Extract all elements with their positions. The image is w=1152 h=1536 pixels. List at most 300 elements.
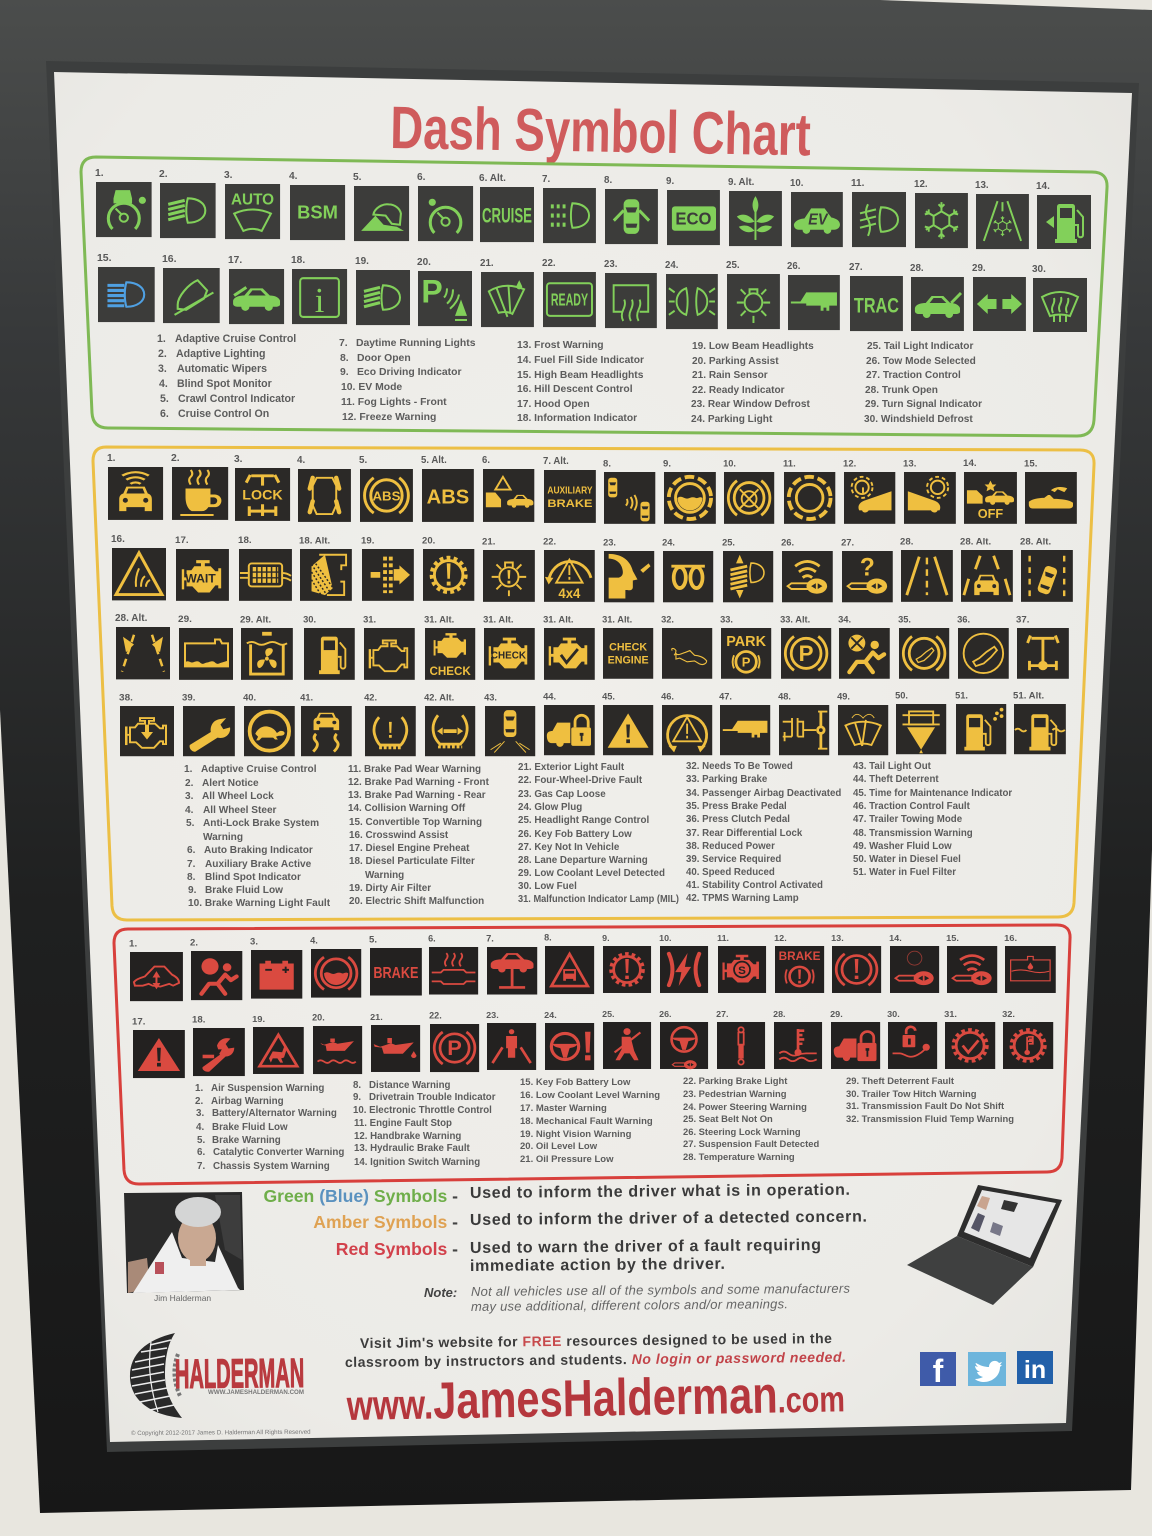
text block: amber list column 4: 34. Passenger Airbag Deactivated bbox=[686, 788, 841, 799]
icon: malfunction check inside: CHECK bbox=[491, 651, 527, 662]
icon: ignition switch warning bbox=[889, 933, 939, 993]
icon: press clutch pedal bbox=[957, 613, 1009, 679]
icon: night vision warning bbox=[252, 1014, 304, 1074]
icon: transmission warning bbox=[778, 691, 829, 755]
website url: www.JamesHalderman.com bbox=[345, 1364, 845, 1431]
icon: parking brake text: 33. bbox=[720, 614, 733, 624]
text block: green list column 5: 25. Tail Light Indicator bbox=[867, 341, 973, 352]
text block: red list column 4: 26. Steering Lock Warning bbox=[683, 1126, 801, 1137]
text block: red list column 1: 3. bbox=[196, 1108, 204, 1119]
text block: amber list column 1: All Wheel Lock bbox=[202, 791, 274, 802]
text block: amber list column 1: 7. bbox=[187, 859, 196, 870]
text block: red list column 5: 32. Transmission Fluid Temp Warning bbox=[846, 1113, 1014, 1124]
icon: washer fluid low: 49. bbox=[837, 691, 850, 701]
icon: transmission fluid temp warning bbox=[1002, 1009, 1053, 1069]
icon: parking brake text: PARK bbox=[726, 634, 767, 650]
icon: TPMS alt bbox=[424, 692, 475, 756]
icon: key not in vehicle bbox=[841, 537, 893, 602]
text block: green list column 4: 24. Parking Light bbox=[691, 414, 773, 425]
text block: green list column 2 bbox=[339, 338, 476, 423]
icon: windshield defrost: 30. bbox=[1032, 264, 1046, 275]
text block: green list column 1: Adaptive Cruise Control bbox=[175, 333, 296, 345]
icon: fuel fill side: 14. bbox=[1036, 181, 1050, 192]
icon: cruise control on alt: 6. Alt. bbox=[479, 173, 506, 184]
text block: amber list column 5: 51. Water in Fuel Filter bbox=[853, 867, 956, 878]
icon: high beam headlights: 15. bbox=[97, 253, 112, 264]
icon: water in diesel fuel bbox=[895, 690, 946, 754]
icon: blind spot indicator: 8. bbox=[603, 458, 611, 469]
icon: mechanical fault: 18. bbox=[192, 1015, 205, 1025]
icon: parking assist: P bbox=[421, 273, 443, 310]
text block: green list column 1: 6. bbox=[160, 408, 169, 420]
icon: crawl control bbox=[353, 172, 409, 241]
icon: oil pressure low bbox=[370, 1012, 420, 1072]
text block: amber list column 5 bbox=[853, 761, 1012, 878]
icon: auxiliary brake bbox=[543, 456, 596, 523]
icon: freeze warning bbox=[914, 179, 968, 248]
text block: green list column 3: 16. Hill Descent Control bbox=[517, 384, 633, 395]
icon: tail light out: 43. bbox=[484, 692, 497, 702]
text block: amber list column 5: 43. Tail Light Out bbox=[853, 761, 932, 772]
icon: drivetrain trouble bbox=[602, 933, 651, 993]
icon: seat belt not on: 25. bbox=[602, 1009, 614, 1019]
text block: green list column 4: 21. Rain Sensor bbox=[692, 370, 768, 381]
icon: pedestrian warning bbox=[486, 1010, 536, 1070]
text block: red list column 2: 13. Hydraulic Brake Fault bbox=[354, 1143, 471, 1154]
icon: parking brake alt: P bbox=[799, 641, 814, 666]
icon: adaptive lighting: 2. bbox=[159, 169, 168, 180]
icon: low coolant level detected: 29. bbox=[178, 614, 192, 625]
text block: green list column 3: 17. Hood Open bbox=[517, 399, 590, 410]
icon: EV mode: EV bbox=[808, 212, 829, 229]
legend: red symbols: Red Symbols - bbox=[336, 1239, 458, 1259]
text block: red list column 1 bbox=[195, 1083, 344, 1172]
icon: water in fuel filter alt bbox=[1013, 691, 1066, 754]
text block: amber list column 1: 8. bbox=[187, 872, 196, 883]
text block: red list column 2: 12. Handbrake Warning bbox=[354, 1131, 461, 1142]
icon: air suspension warning bbox=[129, 939, 183, 1001]
text block: amber list column 3: 24. Glow Plug bbox=[518, 802, 582, 813]
photo: Jim Halderman bbox=[124, 1192, 244, 1293]
text block: green list column 2: Eco Driving Indicator bbox=[357, 367, 462, 378]
icon: parking brake text bbox=[720, 614, 771, 679]
text block: amber list column 2: 20. Electric Shift Malfunction bbox=[349, 896, 484, 907]
text block: green list column 4: 20. Parking Assist bbox=[692, 356, 779, 367]
text block: amber list column 3: 29. Low Coolant Level Detected bbox=[518, 868, 665, 879]
icon: four wheel drive fault: 22. bbox=[543, 536, 556, 547]
text block: amber list column 4: 42. TPMS Warning Lamp bbox=[686, 893, 799, 904]
icon: cruise control on alt: CRUISE bbox=[482, 205, 532, 228]
text block: green list column 2: 11. Fog Lights - Front bbox=[341, 397, 447, 408]
legend: amber symbols: Amber Symbols - bbox=[313, 1212, 458, 1232]
text block: red list column 4: 25. Seat Belt Not On bbox=[683, 1113, 773, 1124]
text block: amber list column 5: 44. Theft Deterrent bbox=[853, 774, 939, 785]
icon: all wheel lock: LOCK bbox=[242, 487, 283, 502]
icon: tail light: 25. bbox=[726, 260, 740, 271]
icon: collision warning off mirrored bbox=[903, 458, 956, 524]
icon: electronic throttle control: 10. bbox=[659, 933, 671, 943]
text block: amber list column 3: 30. Low Fuel bbox=[518, 881, 577, 892]
icon: lane departure alt arrows: 28. Alt. bbox=[115, 613, 148, 624]
text block: amber list column 4: 38. Reduced Power bbox=[686, 841, 775, 852]
icon: check engine bbox=[602, 614, 653, 679]
icon: collision warning off mirrored: 13. bbox=[903, 458, 916, 469]
text block: green list column 3: 14. Fuel Fill Side Indicator bbox=[517, 355, 644, 366]
text block: red list column 5: 30. Trailer Tow Hitch Warning bbox=[846, 1088, 977, 1099]
icon: transmission fault do not shift: 31. bbox=[944, 1009, 957, 1019]
icon: lane departure alt car bbox=[960, 536, 1013, 602]
icon: tow mode bbox=[787, 261, 840, 330]
icon: windshield defrost bbox=[1032, 264, 1087, 332]
icon: malfunction indicator lamp bbox=[363, 614, 415, 680]
icon: lane departure bbox=[900, 536, 953, 602]
icon: rain sensor: 21. bbox=[480, 258, 494, 269]
icon: rear differential lock: 37. bbox=[1016, 614, 1029, 625]
icon: collision warning off: 14. bbox=[963, 458, 977, 469]
icon: TPMS warning: 42. bbox=[364, 692, 377, 702]
text block: red list column 3: 18. Mechanical Fault Warning bbox=[520, 1116, 653, 1127]
text block: green list column 1: 1. bbox=[157, 333, 166, 345]
icon: chassis system warning bbox=[486, 934, 537, 995]
icon: handbrake warning bbox=[774, 933, 824, 993]
text block: green list column 2: 10. EV Mode bbox=[341, 382, 402, 393]
text block: amber list column 4: 37. Rear Differential Lock bbox=[686, 828, 803, 839]
icon: all wheel lock: 3. bbox=[234, 454, 243, 465]
icon: information: 18. bbox=[291, 255, 305, 266]
text block: green list column 1: 4. bbox=[159, 378, 168, 390]
icon: headlight range control: 25. bbox=[722, 536, 735, 547]
icon: convertible top warning bbox=[1024, 458, 1077, 524]
icon: brake pad warning rear: 12. bbox=[843, 458, 856, 469]
text block: amber list column 1: 3. bbox=[185, 791, 194, 802]
icon: parking brake alt: 33. Alt. bbox=[780, 614, 810, 624]
icon: washer fluid low bbox=[837, 691, 888, 755]
icon: brake pad warning rear bbox=[843, 458, 895, 524]
icon: cruise control on alt bbox=[479, 173, 534, 242]
icon: door open: 8. bbox=[604, 175, 612, 186]
icon: exterior light fault: 21. bbox=[482, 536, 495, 547]
legend: green blue symbols: Green (Blue) Symbols - bbox=[263, 1186, 458, 1206]
text block: amber list column 4: 35. Press Brake Pedal bbox=[686, 801, 787, 812]
icon: malfunction check below: CHECK bbox=[429, 664, 471, 678]
icon: TPMS warning bbox=[364, 692, 416, 756]
text block: amber list column 1: Blind Spot Indicator bbox=[205, 872, 301, 883]
icon: brake fluid low: 9. bbox=[663, 458, 671, 469]
icon: chassis system warning: 7. bbox=[486, 934, 494, 944]
legend: green description: Used to inform the driver what is in operation. bbox=[470, 1182, 850, 1202]
icon: brake warning: 5. bbox=[369, 935, 377, 945]
icon: diesel engine preheat: WAIT bbox=[185, 572, 216, 586]
text block: amber list column 1: 4. bbox=[185, 805, 194, 816]
icon: facebook: f bbox=[933, 1353, 944, 1389]
icon: crawl control: 5. bbox=[353, 172, 362, 183]
text block: amber list column 3: 22. Four-Wheel-Drive Fault bbox=[518, 775, 643, 786]
text block: amber list column 1: 6. bbox=[187, 845, 196, 856]
icon: EV mode bbox=[790, 178, 843, 247]
text block: amber list column 1: Adaptive Cruise Control bbox=[201, 764, 317, 775]
icon: diesel particulate filter: 18. bbox=[238, 535, 252, 546]
text block: amber list column 2: 16. Crosswind Assist bbox=[349, 830, 449, 841]
panel: green symbols bbox=[81, 157, 1107, 436]
icon: diesel engine preheat: 17. bbox=[175, 535, 189, 546]
text block: red list column 2: Drivetrain Trouble Indicator bbox=[369, 1092, 496, 1103]
text block: green list column 5: 29. Turn Signal Indicator bbox=[865, 399, 982, 410]
text block: amber list column 2 bbox=[348, 764, 490, 907]
text block: red list column 4: 22. Parking Brake Light bbox=[683, 1075, 788, 1086]
icon: diesel engine preheat bbox=[175, 535, 229, 601]
text block: green list column 5: 27. Traction Control bbox=[866, 370, 961, 381]
text block: red list column 1: Airbag Warning bbox=[211, 1096, 284, 1107]
icon: coolant fan alt: 29. Alt. bbox=[240, 614, 271, 625]
icon: malfunction indicator lamp: 31. bbox=[363, 614, 376, 625]
text block: red list column 4: 24. Power Steering Warning bbox=[683, 1101, 807, 1112]
icon: cruise control on bbox=[417, 172, 473, 241]
text block: amber list column 1: 9. bbox=[188, 885, 197, 896]
text block: red list column 1: 6. bbox=[197, 1147, 205, 1158]
text block: green list column 2: 9. bbox=[340, 367, 349, 378]
text block: amber list column 3: 31. Malfunction Indicator Lamp (MIL) bbox=[518, 894, 679, 905]
icon: rear window defrost bbox=[604, 259, 657, 328]
icon: brake fluid low red: 4. bbox=[310, 936, 318, 946]
icon: speed reduced turtle: 40. bbox=[243, 692, 256, 702]
icon: airbag warning: 2. bbox=[190, 938, 198, 947]
text block: amber list column 1: Warning bbox=[203, 832, 243, 843]
icon: glow plug bbox=[662, 536, 713, 602]
icon: adaptive lighting bbox=[159, 169, 216, 238]
icon: auto braking: 6. bbox=[482, 455, 490, 466]
icon: alert notice cup: 2. bbox=[171, 453, 180, 464]
text block: red list column 2: 8. bbox=[353, 1080, 361, 1091]
text block: amber list column 5: 48. Transmission Warning bbox=[853, 828, 973, 839]
icon: press brake pedal bbox=[898, 614, 949, 679]
icon: lane departure alt drift bbox=[1020, 536, 1073, 602]
text block: amber list column 5: 45. Time for Maintenance Indicator bbox=[853, 788, 1012, 799]
icon: adaptive cruise control bbox=[95, 168, 152, 237]
icon: brake warning: BRAKE bbox=[373, 964, 418, 982]
text block: red list column 5 bbox=[846, 1075, 1014, 1124]
text block: red list column 4: 27. Suspension Fault Detected bbox=[683, 1138, 819, 1149]
text block: amber list column 1: 5. bbox=[186, 818, 195, 829]
text block: red list column 2: 10. Electronic Throttle Control bbox=[353, 1105, 492, 1116]
text block: green list column 4: 22. Ready Indicator bbox=[692, 385, 785, 396]
text block: red list column 1: 1. bbox=[195, 1083, 203, 1094]
text block: amber list column 3: 27. Key Not In Vehicle bbox=[518, 842, 620, 853]
icon: trailer tow hitch warning: 30. bbox=[887, 1009, 900, 1019]
text block: amber list column 2: 18. Diesel Particulate Filter bbox=[349, 856, 475, 867]
icon: cruise control on: 6. bbox=[417, 172, 426, 183]
text block: green list column 1: 5. bbox=[160, 393, 169, 405]
icon: adaptive cruise control amber bbox=[107, 453, 163, 520]
icon: fog lights front bbox=[851, 178, 906, 247]
icon: headlight range control bbox=[722, 536, 773, 602]
icon: parking light: 24. bbox=[665, 260, 679, 271]
text block: amber list column 3: 28. Lane Departure Warning bbox=[518, 855, 648, 866]
icon: low beam headlights: 19. bbox=[355, 256, 369, 267]
icon: press brake pedal: 35. bbox=[898, 614, 911, 624]
icon: automatic wipers bbox=[224, 170, 280, 239]
text block: green list column 2: 12. Freeze Warning bbox=[342, 412, 436, 423]
text block: red list column 4: 28. Temperature Warning bbox=[683, 1151, 795, 1162]
icon: blind spot indicator bbox=[603, 458, 655, 524]
text block: amber list column 2: 17. Diesel Engine Preheat bbox=[349, 843, 470, 854]
text block: amber list column 1: 2. bbox=[185, 778, 194, 789]
icon: lane departure: 28. bbox=[900, 536, 913, 547]
text block: green list column 1: Crawl Control Indicator bbox=[178, 393, 295, 405]
text block: amber list column 4: 32. Needs To Be Towed bbox=[686, 761, 793, 772]
text block: amber list column 3 bbox=[518, 762, 679, 905]
icon: hydraulic brake fault bbox=[831, 933, 881, 993]
icon: key fob battery low bbox=[781, 537, 833, 602]
icon: hood open: 17. bbox=[228, 255, 242, 266]
photo caption: Jim Halderman bbox=[154, 1293, 211, 1303]
text block: green list column 2: 8. bbox=[340, 353, 349, 364]
icon: engine fault stop: 11. bbox=[717, 933, 729, 943]
icon: twitter bbox=[968, 1352, 1006, 1386]
icon: malfunction check inside: 31. Alt. bbox=[483, 614, 514, 625]
icon: ABS alt: 5. Alt. bbox=[421, 455, 447, 466]
icon: rear differential lock bbox=[1016, 614, 1069, 679]
icon: crosswind assist: 16. bbox=[111, 534, 125, 545]
icon: malfunction check mark bbox=[543, 614, 595, 680]
icon: key fob battery low: 26. bbox=[781, 537, 794, 548]
legend: red description: immediate action by the driver. bbox=[470, 1256, 725, 1275]
text block: red list column 3 bbox=[520, 1077, 660, 1165]
icon: battery alternator warning: 3. bbox=[250, 937, 258, 947]
icon: auxiliary brake: AUXILIARY bbox=[547, 485, 593, 497]
icon: coolant fan alt bbox=[240, 614, 293, 680]
icon: parking brake light: P bbox=[447, 1035, 462, 1060]
icon: master warning: 17. bbox=[132, 1017, 145, 1027]
icon: alert notice cup bbox=[171, 453, 228, 520]
text block: amber list column 2: 19. Dirty Air Filter bbox=[349, 883, 431, 894]
text block: green list column 4 bbox=[691, 341, 814, 425]
icon: passenger airbag deactivated bbox=[838, 613, 890, 679]
icon: key not in vehicle: 27. bbox=[841, 537, 854, 548]
icon: diesel particulate filter bbox=[238, 535, 292, 601]
icon: ABS alt: ABS bbox=[427, 486, 469, 508]
text block: amber list column 1: Anti-Lock Brake System bbox=[203, 818, 319, 829]
text block: green list column 1: Automatic Wipers bbox=[177, 363, 267, 375]
icon: electric shift malfunction: 20. bbox=[422, 535, 435, 546]
icon: service required: 39. bbox=[182, 693, 195, 703]
icon: rain sensor bbox=[480, 258, 534, 327]
icon: power steering warning: 24. bbox=[544, 1010, 557, 1020]
icon: check engine: CHECK bbox=[609, 642, 647, 654]
icon: ready: READY bbox=[551, 290, 588, 310]
icon: tail light out bbox=[484, 692, 535, 756]
icon: theft deterrent fault: 29. bbox=[830, 1009, 843, 1019]
icon: reduced power bbox=[119, 693, 174, 756]
text block: green list column 1 bbox=[157, 333, 296, 420]
text block: red list column 1: 5. bbox=[197, 1135, 205, 1146]
text block: red list column 1: Chassis System Warning bbox=[213, 1161, 330, 1172]
icon: ignition switch warning: 14. bbox=[889, 933, 902, 943]
icon: temperature warning: 28. bbox=[773, 1009, 785, 1019]
icon: theft deterrent: 44. bbox=[543, 691, 556, 701]
icon: ready: 22. bbox=[542, 258, 556, 269]
icon: ABS: 5. bbox=[359, 455, 367, 466]
icon: battery alternator warning bbox=[250, 937, 302, 999]
icon: ABS: ABS bbox=[372, 488, 401, 503]
icon: parking brake light: 22. bbox=[429, 1011, 442, 1021]
icon: trunk open bbox=[910, 263, 964, 331]
icon: dirty air filter: 19. bbox=[361, 535, 374, 546]
icon: transmission fluid temp warning: 32. bbox=[1002, 1009, 1015, 1019]
text block: red list column 1: 2. bbox=[195, 1096, 203, 1107]
icon: fog lights front: 11. bbox=[851, 178, 865, 189]
icon: mechanical fault bbox=[192, 1015, 245, 1076]
icon: EV mode: 10. bbox=[790, 178, 804, 189]
icon: facebook bbox=[920, 1352, 956, 1389]
icon: theft deterrent bbox=[543, 691, 595, 755]
icon: water in fuel filter alt: 51. Alt. bbox=[1013, 691, 1044, 701]
title: Dash Symbol Chart bbox=[390, 95, 812, 169]
icon: hill descent: 16. bbox=[162, 254, 177, 265]
icon: turn signal bbox=[972, 263, 1026, 331]
icon: oil pressure low: 21. bbox=[370, 1012, 383, 1022]
icon: brake pad warning front: 11. bbox=[783, 458, 796, 469]
icon: trailer towing mode: 47. bbox=[719, 691, 732, 701]
icon: low beam headlights bbox=[355, 256, 410, 325]
icon: traction control fault bbox=[661, 691, 712, 755]
icon: freeze warning: 12. bbox=[914, 179, 928, 190]
icon: hood open bbox=[228, 255, 284, 324]
icon: oil level low: 20. bbox=[312, 1013, 325, 1023]
icon: traction control fault: 46. bbox=[661, 691, 674, 701]
text block: amber list column 1: Auxiliary Brake Active bbox=[205, 859, 312, 870]
text block: red list column 1: Air Suspension Warning bbox=[211, 1083, 324, 1094]
text block: red list column 1: Brake Warning bbox=[212, 1135, 281, 1146]
icon: collision warning off: OFF bbox=[978, 507, 1003, 521]
icon: electronic throttle control bbox=[659, 933, 708, 993]
icon: hill descent bbox=[162, 254, 220, 323]
text block: amber list column 4 bbox=[686, 761, 841, 904]
icon: high beam headlights bbox=[97, 253, 155, 322]
text block: red list column 1: 4. bbox=[196, 1122, 204, 1133]
icon: blind spot monitor: 4. bbox=[289, 171, 298, 182]
icon: parking brake light bbox=[429, 1011, 479, 1072]
icon: trailer towing mode bbox=[719, 691, 770, 755]
icon: adaptive cruise control: 1. bbox=[95, 168, 104, 179]
text block: amber list column 1: Alert Notice bbox=[202, 778, 259, 789]
text block: amber list column 3: 23. Gas Cap Loose bbox=[518, 789, 606, 800]
icon: transmission fault do not shift bbox=[944, 1009, 995, 1069]
text block: amber list column 2: 14. Collision Warning Off bbox=[348, 803, 466, 814]
text block: red list column 2: 11. Engine Fault Stop bbox=[354, 1118, 452, 1129]
text block: amber list column 1: Brake Fluid Low bbox=[205, 885, 283, 896]
text block: amber list column 4: 39. Service Required bbox=[686, 854, 781, 865]
legend: red description bbox=[470, 1237, 821, 1275]
icon: engine fault stop bbox=[717, 933, 766, 993]
icon: master warning bbox=[132, 1017, 185, 1078]
icon: oil level low bbox=[312, 1013, 362, 1074]
icon: time for maintenance bbox=[602, 691, 653, 755]
icon: information bbox=[291, 255, 347, 324]
icon: brake pad wear warning: 10. bbox=[723, 458, 736, 469]
icon: seat belt not on bbox=[602, 1009, 651, 1069]
icon: low fuel bbox=[303, 614, 355, 680]
icon: stability control activated: 41. bbox=[300, 692, 313, 702]
icon: lane departure alt car: 28. Alt. bbox=[960, 536, 991, 547]
icon: malfunction check inside bbox=[483, 614, 535, 680]
icon: catalytic converter warning: 6. bbox=[428, 934, 436, 944]
icon: malfunction check below: 31. Alt. bbox=[424, 614, 454, 625]
icon: gas cap loose bbox=[603, 536, 654, 602]
icon: power steering warning bbox=[544, 1010, 594, 1070]
website promotion text bbox=[345, 1330, 846, 1370]
icon: automatic wipers: 3. bbox=[224, 170, 233, 181]
icon: passenger airbag deactivated: 34. bbox=[838, 613, 851, 624]
